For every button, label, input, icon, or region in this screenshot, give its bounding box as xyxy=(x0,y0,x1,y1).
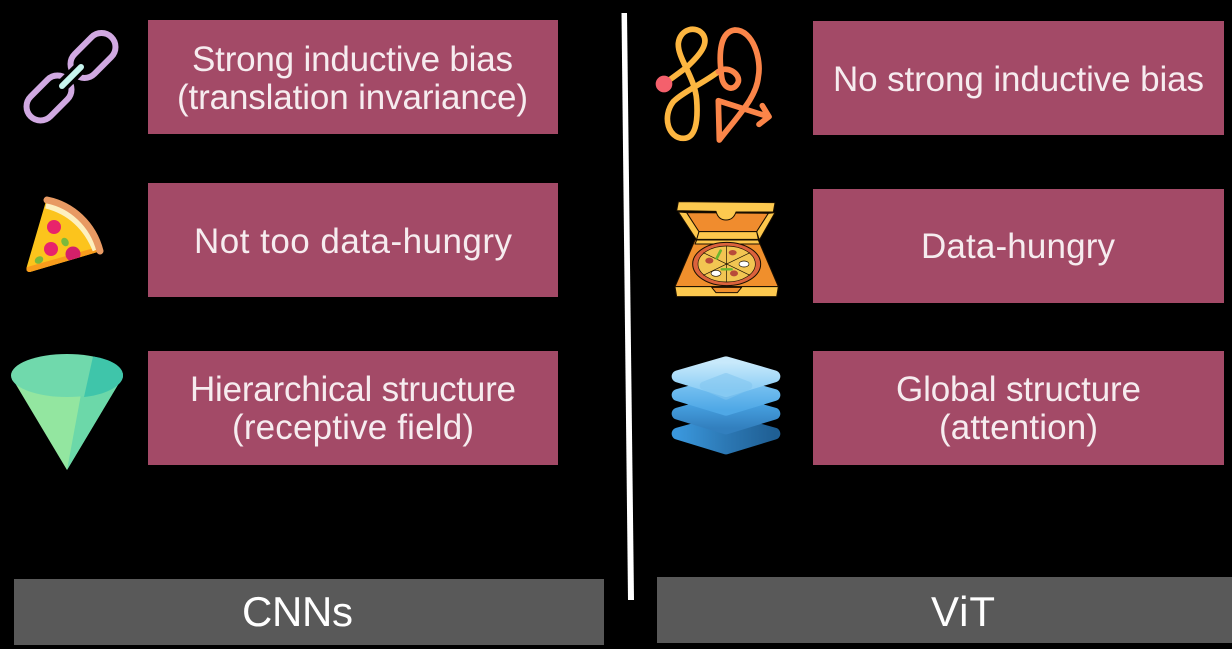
label bar: ViT: ViT xyxy=(931,588,995,635)
panel: CNNs column xyxy=(11,20,604,645)
row: data-hungry: Data-hungry xyxy=(921,227,1116,266)
row: global structure xyxy=(813,351,1224,465)
icon: pizza box xyxy=(675,202,778,297)
panel: ViT column xyxy=(656,21,1232,643)
icon: pizza slice xyxy=(24,200,103,276)
row: hierarchical structure xyxy=(148,351,558,465)
label bar: CNNs xyxy=(14,579,604,645)
row: global structure: Global structure xyxy=(896,370,1141,409)
row: strong inductive bias: Strong inductive bias xyxy=(192,40,513,79)
row: hierarchical structure: (receptive field) xyxy=(232,408,474,447)
label bar: CNNs: CNNs xyxy=(242,588,353,635)
icon: tangled path xyxy=(656,29,769,140)
divider xyxy=(622,13,634,600)
row: hierarchical structure: Hierarchical structure xyxy=(190,370,516,409)
row: strong inductive bias: (translation invariance) xyxy=(177,78,528,117)
label bar: ViT xyxy=(657,577,1232,643)
icon: stacked layers xyxy=(678,362,774,448)
row: strong inductive bias xyxy=(148,20,558,134)
icon: chain link xyxy=(21,27,121,126)
row: no strong inductive bias xyxy=(813,21,1224,135)
row: not too data-hungry: Not too data-hungry xyxy=(194,222,512,261)
icon: cone xyxy=(11,354,123,470)
row: no strong inductive bias: No strong inductive bias xyxy=(833,60,1204,99)
row: not too data-hungry xyxy=(148,183,558,297)
row: global structure: (attention) xyxy=(939,408,1098,447)
row: data-hungry xyxy=(813,189,1224,303)
